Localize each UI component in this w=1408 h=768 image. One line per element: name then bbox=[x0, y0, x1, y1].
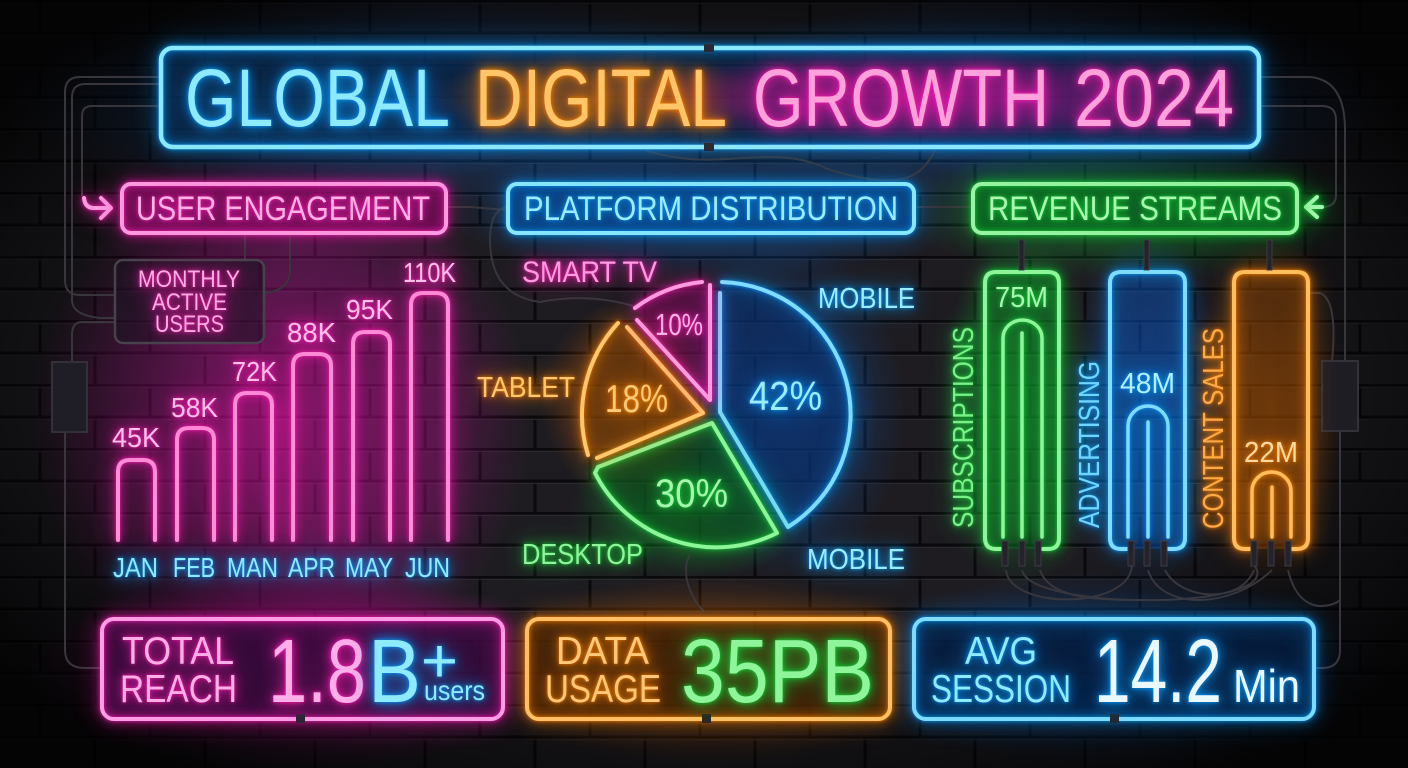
label: desktop: DESKTOP bbox=[522, 539, 643, 571]
monthly active users label bbox=[115, 260, 264, 343]
stat panel: total reach: TOTAL bbox=[122, 630, 234, 673]
tube: advertising: 48M bbox=[1120, 368, 1175, 400]
slice: smart tv 10%: 10% bbox=[655, 307, 703, 342]
title text: 2024 bbox=[1074, 53, 1234, 144]
tube: subscriptions bbox=[948, 272, 1059, 549]
slice: tablet 18%: 18% bbox=[605, 378, 668, 421]
title text: DIGITAL bbox=[475, 53, 727, 144]
bar values: 72K bbox=[232, 356, 277, 387]
stat panel: average session: AVG bbox=[965, 630, 1037, 673]
stat panel: average session: Min bbox=[1233, 660, 1300, 712]
stat panel: data usage: USAGE bbox=[545, 668, 661, 711]
slice: tablet 18% bbox=[582, 323, 703, 458]
wiring and junction boxes bbox=[52, 77, 1358, 668]
bar values: 88K bbox=[287, 317, 336, 348]
label: smart tv: SMART TV bbox=[522, 256, 657, 289]
monthly active users label: MONTHLY bbox=[138, 266, 240, 293]
stat panel: total reach: + bbox=[421, 627, 458, 696]
bar values bbox=[112, 257, 456, 453]
tube: advertising: ADVERTISING bbox=[1074, 361, 1106, 528]
stat panel: total reach: 1.8 bbox=[268, 622, 366, 722]
bar values: 58K bbox=[171, 392, 218, 423]
stat panel: average session bbox=[914, 619, 1314, 723]
arrow: to user engagement bbox=[84, 198, 111, 218]
panel: platform distribution heading bbox=[508, 184, 914, 233]
slice: mobile 42% bbox=[720, 282, 851, 527]
slice: mobile 42%: 42% bbox=[749, 373, 822, 419]
stat panel: total reach bbox=[102, 619, 503, 723]
tube: content sales: CONTENT SALES bbox=[1198, 328, 1230, 529]
tube: subscriptions: SUBSCRIPTIONS bbox=[948, 327, 980, 528]
label: mobile top: MOBILE bbox=[818, 283, 915, 315]
slice: smart tv 10% bbox=[635, 282, 710, 400]
stat panel: average session: SESSION bbox=[931, 668, 1071, 711]
month labels: MAY bbox=[345, 552, 393, 583]
label: mobile bottom: MOBILE bbox=[807, 544, 905, 576]
month labels: APR bbox=[288, 552, 335, 583]
monthly active users label: ACTIVE bbox=[152, 289, 227, 316]
month labels: FEB bbox=[173, 552, 215, 583]
stat panel: total reach: users bbox=[424, 675, 485, 706]
slice: desktop 30%: 30% bbox=[655, 472, 728, 516]
month labels: JAN bbox=[113, 552, 158, 583]
panel: revenue streams heading: REVENUE STREAMS bbox=[988, 190, 1282, 228]
month labels: JUN bbox=[405, 552, 450, 583]
panel: user engagement heading: USER ENGAGEMENT bbox=[136, 190, 430, 228]
stat panel: data usage bbox=[527, 619, 890, 723]
bar values: 110K bbox=[403, 257, 456, 288]
tube: advertising bbox=[1074, 272, 1185, 549]
tube tints bbox=[985, 272, 1308, 549]
bars bbox=[118, 293, 448, 540]
stat panel: data usage: 35PB bbox=[681, 622, 874, 722]
pie chart: platform distribution bbox=[477, 256, 915, 576]
stat panel: total reach: REACH bbox=[120, 668, 237, 711]
panel: revenue streams heading bbox=[973, 184, 1297, 233]
monthly active users label: USERS bbox=[155, 311, 224, 338]
panel: user engagement heading bbox=[122, 184, 446, 233]
bar values: 45K bbox=[112, 422, 160, 453]
bar chart: monthly active users bbox=[112, 257, 456, 583]
tube: content sales: 22M bbox=[1244, 437, 1298, 469]
title panel bbox=[161, 44, 1259, 151]
tube: subscriptions: 75M bbox=[995, 282, 1048, 314]
stat panel: average session: 14.2 bbox=[1094, 622, 1222, 722]
title text bbox=[185, 53, 1234, 144]
title text: GLOBAL bbox=[185, 53, 450, 144]
label: tablet: TABLET bbox=[477, 372, 575, 404]
revenue chart bbox=[948, 240, 1308, 566]
month labels: MAN bbox=[227, 552, 278, 583]
title text: GROWTH bbox=[753, 53, 1049, 144]
tube connectors bbox=[1002, 240, 1291, 566]
panel: platform distribution heading: PLATFORM DISTRIBUTION bbox=[524, 190, 898, 228]
month labels bbox=[113, 552, 450, 583]
stat panel: data usage: DATA bbox=[556, 630, 649, 673]
tube: content sales bbox=[1198, 272, 1308, 549]
arrow: to revenue streams bbox=[1306, 197, 1322, 217]
slice: desktop 30% bbox=[595, 423, 777, 547]
bar values: 95K bbox=[346, 294, 393, 325]
stat panel: total reach: B bbox=[368, 622, 421, 722]
